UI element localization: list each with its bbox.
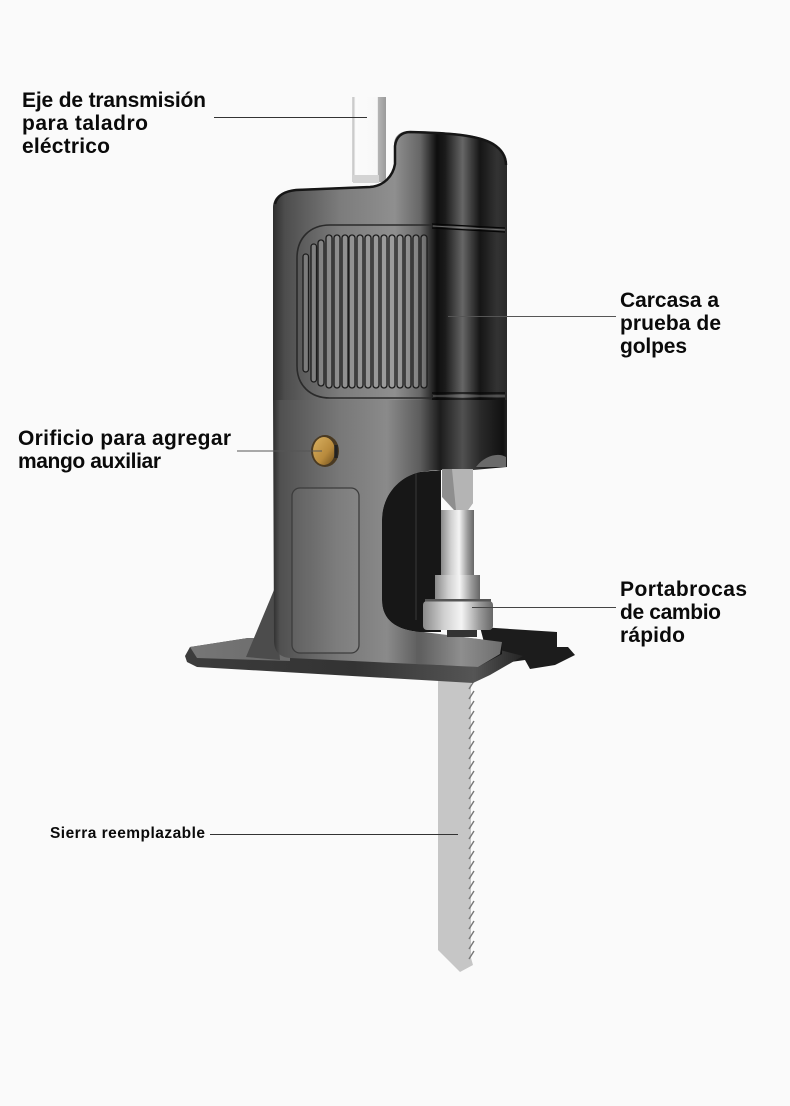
drive shaft xyxy=(352,97,386,183)
lower right underside lip xyxy=(476,455,506,467)
base plate xyxy=(185,638,523,683)
rear support rib xyxy=(246,590,280,660)
label: quick-change chuck: Portabrocas xyxy=(620,578,747,601)
label: auxiliary handle hole: Orificio para agregar xyxy=(18,427,231,450)
rear base tray xyxy=(480,627,575,669)
side cover panel xyxy=(292,488,359,653)
label: shockproof housing: prueba de xyxy=(620,312,721,335)
label: quick-change chuck xyxy=(620,578,747,647)
chuck assembly xyxy=(423,469,493,637)
mounting hole xyxy=(311,435,339,467)
label: drive shaft xyxy=(22,89,206,158)
label: quick-change chuck: rápido xyxy=(620,624,685,647)
grip panel with ribs xyxy=(297,224,505,399)
housing upper xyxy=(273,131,507,400)
label: quick-change chuck: de cambio xyxy=(620,601,721,624)
label: drive shaft: para taladro xyxy=(22,112,148,135)
top edge highlight xyxy=(275,132,506,204)
label: shockproof housing: Carcasa a xyxy=(620,289,719,312)
label: auxiliary handle hole xyxy=(18,427,231,473)
saw blade xyxy=(438,678,474,972)
label: auxiliary handle hole: mango auxiliar xyxy=(18,450,161,473)
leader line: drive shaft xyxy=(214,116,367,118)
label: shockproof housing: golpes xyxy=(620,335,687,358)
leader line: blade xyxy=(210,834,458,836)
icon: saw adapter product illustration xyxy=(185,97,575,972)
label: replaceable blade: Sierra reemplazable xyxy=(50,825,205,842)
leader line: chuck xyxy=(472,606,616,608)
label: drive shaft: Eje de transmisión xyxy=(22,89,206,112)
label: drive shaft: eléctrico xyxy=(22,135,110,158)
housing lower xyxy=(273,395,507,667)
right plate top surface xyxy=(416,631,502,667)
leader line: housing xyxy=(448,316,616,318)
arch opening xyxy=(382,470,441,632)
label: shockproof housing xyxy=(620,289,721,358)
leader line: auxiliary handle hole xyxy=(237,450,322,452)
